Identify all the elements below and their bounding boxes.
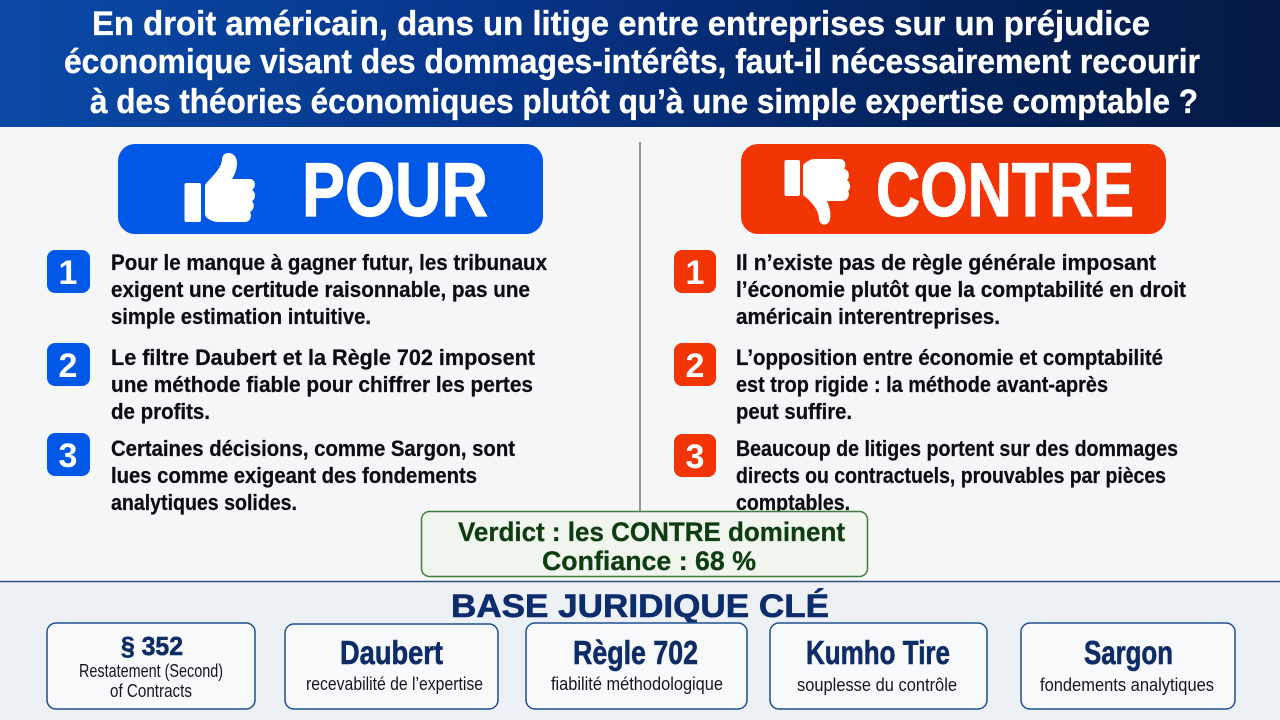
argument 1: simple estimation intuitive. [111,304,371,329]
card: sargon [1021,623,1235,709]
argument 2: 2 [686,347,704,385]
pour heading [118,144,543,234]
legal basis section [0,581,1280,720]
card: 352 [47,623,255,709]
card: kumho tire: Kumho Tire [806,634,950,671]
argument 1 [47,250,548,329]
card: kumho tire [770,623,987,709]
argument 2: Le filtre Daubert et la Règle 702 imposent [111,345,536,370]
pour heading: POUR [302,148,488,233]
card: daubert [285,624,498,709]
argument 3: Beaucoup de litiges portent sur des dommages [736,436,1178,461]
argument 3: directs ou contractuels, prouvables par pièces [736,463,1166,488]
argument 3: Certaines décisions, comme Sargon, sont [111,436,516,461]
argument 1: 1 [686,254,704,292]
argument 1: l’économie plutôt que la comptabilité en droit [736,277,1187,302]
card: 352: Restatement (Second) [79,661,223,681]
argument 1: américain interentreprises. [736,304,1000,329]
contre heading: CONTRE [876,148,1134,233]
card: sargon: Sargon [1084,634,1173,671]
argument 1 [674,250,1187,329]
argument 2: 2 [59,347,77,385]
card: 352: of Contracts [110,681,192,701]
argument 2 [47,343,536,424]
argument 3: 3 [686,438,704,476]
argument 3: comptables. [736,490,850,515]
title banner: En droit américain, dans un litige entre entreprises sur un préjudice [92,5,1150,43]
section heading: BASE JURIDIQUE CLÉ [451,588,829,624]
card: regle 702 [526,623,747,709]
title banner [0,0,1280,127]
argument 3: lues comme exigeant des fondements [111,463,477,488]
card: 352: § 352 [121,631,183,661]
argument 3 [674,434,1178,515]
argument 2 [674,343,1163,424]
card: daubert: recevabilité de l’expertise [306,674,483,694]
verdict callout: Confiance : 68 % [542,546,756,576]
icon: thumbs down [784,159,850,225]
verdict callout: Verdict : les CONTRE dominent [458,517,845,547]
card: sargon: fondements analytiques [1040,675,1214,695]
argument 1: exigent une certitude raisonnable, pas une [111,277,530,302]
argument 2: de profits. [111,399,210,424]
card: daubert: Daubert [340,634,443,671]
argument 1: Il n’existe pas de règle générale imposant [736,250,1157,275]
card: regle 702: Règle 702 [573,634,698,671]
argument 2: est trop rigide : la méthode avant-après [736,372,1108,397]
argument 2: une méthode fiable pour chiffrer les pertes [111,372,533,397]
verdict callout [422,512,868,576]
card: kumho tire: souplesse du contrôle [797,675,957,695]
panel: contre [674,144,1187,515]
argument 2: L’opposition entre économie et comptabilité [736,345,1163,370]
argument 2: peut suffire. [736,399,852,424]
title banner: économique visant des dommages-intérêts, faut-il nécessairement recourir [64,43,1200,81]
argument 3: 3 [59,437,77,475]
argument 1: Pour le manque à gagner futur, les tribunaux [111,250,548,275]
panel: pour [47,144,548,515]
card: regle 702: fiabilité méthodologique [551,674,723,694]
argument 1: 1 [59,254,77,292]
contre heading [741,144,1166,234]
argument 3 [47,433,516,515]
icon: thumbs up [184,153,255,222]
argument 3: analytiques solides. [111,490,297,515]
title banner: à des théories économiques plutôt qu’à une simple expertise comptable ? [90,83,1198,121]
